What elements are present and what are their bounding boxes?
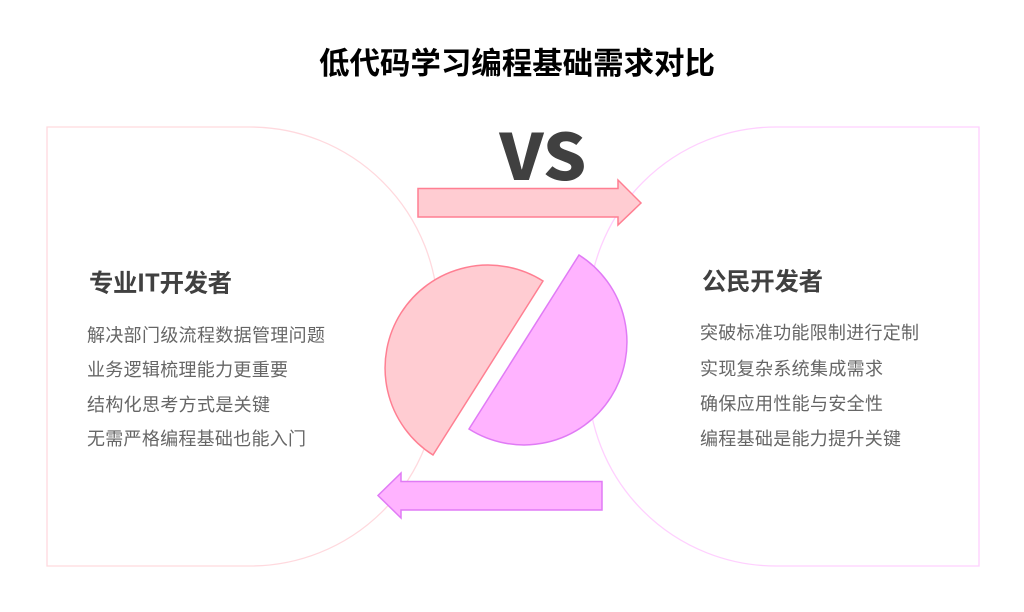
VS label: VS — [498, 107, 586, 199]
title: 低代码学习编程基础需求对比 — [319, 39, 715, 83]
list: professional IT developer points: 无需严格编程基础也能入门 — [87, 425, 306, 451]
panel: professional IT developers — [47, 127, 438, 566]
panel: citizen developers — [588, 127, 979, 566]
arrow: leftward — [378, 473, 602, 518]
heading: citizen developers: 公民开发者 — [702, 263, 823, 298]
list: citizen developer points: 编程基础是能力提升关键 — [700, 425, 901, 451]
list: citizen developer points: 实现复杂系统集成需求 — [700, 355, 883, 381]
heading: professional IT developers: 专业IT开发者 — [89, 264, 232, 300]
list: citizen developer points: 确保应用性能与安全性 — [700, 390, 883, 416]
arrow: rightward — [418, 180, 641, 225]
half circle: purple — [469, 255, 627, 445]
list: citizen developer points — [700, 319, 919, 451]
list: professional IT developer points: 解决部门级流程数据管理问题 — [87, 322, 325, 348]
list: professional IT developer points: 结构化思考方式是关键 — [87, 391, 270, 417]
list: professional IT developer points — [87, 322, 325, 451]
list: professional IT developer points: 业务逻辑梳理能力更重要 — [87, 356, 288, 382]
half circle: pink — [385, 265, 543, 455]
list: citizen developer points: 突破标准功能限制进行定制 — [700, 319, 919, 345]
